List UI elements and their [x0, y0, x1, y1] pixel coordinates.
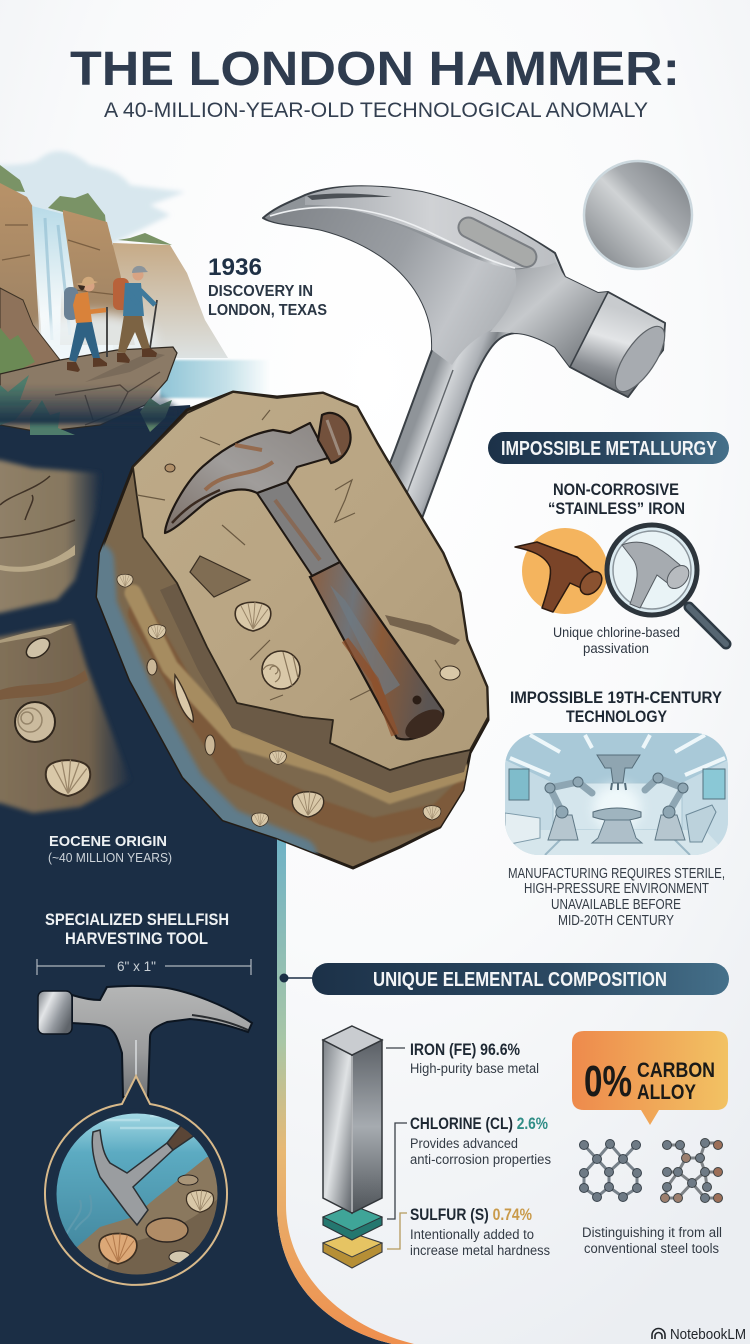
heading: impossible 19th-century technology: TECHNOLOGY	[566, 707, 668, 726]
rusty grip	[310, 562, 443, 739]
callout: 0% carbon alloy: ALLOY	[637, 1081, 696, 1104]
clouds	[0, 151, 185, 245]
rock notch shadows	[190, 556, 250, 597]
foreground plants	[0, 375, 32, 425]
mid cliff	[60, 210, 135, 345]
text: manufacturing requirement: UNAVAILABLE BEFORE	[551, 897, 681, 913]
backpack	[64, 287, 78, 320]
callout: 0% carbon alloy: CARBON	[637, 1059, 715, 1082]
text: manufacturing requirement: MID-20TH CENTURY	[558, 913, 674, 929]
text: distinguishing caption	[582, 1225, 722, 1256]
teal chlorine slab	[323, 1205, 382, 1240]
rock ledge	[0, 347, 177, 432]
label: chlorine: Provides advanced	[410, 1136, 518, 1151]
text: manufacturing requirement	[508, 866, 725, 929]
panel: unique elemental composition heading: UNIQUE ELEMENTAL COMPOSITION	[373, 969, 667, 991]
text: manufacturing requirement: HIGH-PRESSURE ENVIRONMENT	[524, 881, 709, 897]
title: THE LONDON HAMMER:	[70, 43, 680, 96]
rusty head and claw	[165, 423, 328, 533]
dimension line: 6 x 1	[37, 958, 251, 975]
connector lines from column to labels	[386, 1048, 407, 1249]
logo: NotebookLM: NotebookLM	[670, 1327, 746, 1343]
heading: non-corrosive stainless iron	[548, 480, 685, 518]
overhead press tool	[597, 755, 640, 783]
lab floor	[505, 830, 728, 855]
rock top surface	[133, 392, 488, 770]
fossil shells on rock	[235, 602, 271, 631]
left robot arm	[550, 782, 592, 812]
fossil shells	[23, 634, 53, 662]
hiker: man	[113, 266, 157, 363]
hammer slot	[455, 214, 540, 270]
rock shelf shadow	[160, 583, 470, 793]
title: A 40-MILLION-YEAR-OLD TECHNOLOGICAL ANOMALY	[104, 99, 648, 122]
illustration: sterile high-tech lab	[505, 733, 728, 855]
rusty hammer	[165, 413, 448, 744]
right robot arm	[645, 778, 683, 812]
lab back wall	[553, 783, 682, 830]
callout: 0% carbon alloy: 0%	[584, 1057, 632, 1106]
legs	[69, 322, 100, 362]
waterfall	[32, 206, 82, 345]
text: passivation caption	[553, 624, 680, 656]
rusty poll	[318, 413, 351, 463]
callout: 0% carbon alloy	[572, 1031, 728, 1125]
lab ceiling	[505, 733, 728, 783]
illustration: polished steel hammer	[263, 161, 692, 613]
label: specialized shellfish tool: HARVESTING TOOL	[65, 929, 208, 948]
left cliff	[0, 183, 42, 345]
heading: non-corrosive stainless iron: NON-CORROSIVE	[553, 480, 679, 499]
hiker: woman	[64, 277, 107, 372]
inset ring with pointer	[45, 1076, 227, 1285]
console units	[505, 813, 540, 845]
label: sulfur	[410, 1205, 550, 1258]
torso	[73, 292, 92, 323]
hammer striking face	[606, 319, 674, 399]
rock body	[97, 392, 488, 868]
label: eocene origin: (~40 MILLION YEARS)	[48, 850, 172, 865]
illustration: waterfall landscape with hikers	[0, 151, 272, 435]
label: 1936 discovery: DISCOVERY IN	[208, 283, 313, 300]
title	[70, 43, 680, 122]
text: passivation caption: Unique chlorine-based	[553, 624, 680, 640]
icon: magnifier over clean hammer	[607, 525, 726, 644]
connector dot to composition heading	[280, 974, 314, 982]
label: chlorine	[410, 1114, 551, 1167]
chart: stacked element column	[323, 1026, 382, 1268]
illustration: small hammer side view	[38, 986, 252, 1097]
detail inset: hammer digging shellfish underwater	[45, 1076, 227, 1290]
rock cracks	[137, 410, 445, 700]
hammer claw face	[265, 209, 517, 365]
mist	[35, 312, 155, 368]
label: specialized shellfish tool: SPECIALIZED SHELLFISH	[45, 910, 229, 929]
distant cliff	[113, 243, 228, 358]
seabed	[77, 1157, 218, 1269]
label: iron: High-purity base metal	[410, 1061, 539, 1076]
hammer neck	[490, 262, 608, 367]
boulder	[0, 288, 60, 375]
label: eocene origin: EOCENE ORIGIN	[49, 833, 167, 850]
central pedestal	[593, 808, 641, 821]
label: 1936 discovery: 1936	[208, 254, 262, 281]
steel sample disc	[584, 161, 692, 269]
label: sulfur: SULFUR (S) 0.74%	[410, 1205, 532, 1224]
trees on cliffs	[0, 165, 172, 245]
heading: non-corrosive stainless iron: “STAINLESS” IRON	[548, 499, 685, 518]
label: sulfur: increase metal hardness	[410, 1243, 550, 1258]
heading: impossible 19th-century technology	[510, 688, 723, 726]
gradient stripe along sidebar	[277, 840, 414, 1344]
icon: rusty hammer on orange circle	[515, 528, 608, 614]
illustration: fossil rock	[97, 392, 488, 868]
label: 1936 discovery	[208, 254, 327, 319]
diagram: steel molecule lattice	[660, 1138, 722, 1202]
wall screens	[509, 769, 529, 800]
label: chlorine: anti-corrosion properties	[410, 1152, 551, 1167]
seabed shells	[99, 1233, 137, 1264]
label: iron: IRON (FE) 96.6%	[410, 1040, 520, 1059]
boots	[67, 358, 107, 372]
label: 1936 discovery: LONDON, TEXAS	[208, 302, 327, 319]
label: iron	[410, 1040, 539, 1076]
lab side walls	[505, 760, 728, 850]
text: passivation caption: passivation	[583, 640, 649, 656]
label: sulfur: Intentionally added to	[410, 1227, 534, 1242]
dimension line: 6 x 1: 6" x 1"	[117, 958, 156, 974]
panel: dark navy sidebar	[0, 405, 392, 1344]
panel: impossible metallurgy heading	[488, 432, 729, 464]
hammer top band	[305, 186, 556, 268]
steel iron column	[323, 1026, 382, 1213]
pole	[106, 307, 108, 357]
dark fade under scene	[0, 385, 180, 424]
underwater hammer	[92, 1130, 173, 1225]
rusty handle shaft	[257, 482, 340, 577]
heading: impossible 19th-century technology: IMPOSSIBLE 19TH-CENTURY	[510, 688, 723, 707]
illustration: strata cross-section with shells	[0, 460, 130, 813]
label: eocene origin	[48, 833, 172, 865]
hammer silhouette with handle	[263, 186, 665, 613]
gold sulfur slab	[323, 1233, 382, 1268]
water	[160, 360, 272, 398]
panel: unique elemental composition heading	[312, 963, 729, 995]
label: chlorine: CHLORINE (CL) 2.6%	[410, 1114, 548, 1133]
shrub	[0, 328, 35, 375]
handle highlight	[380, 370, 453, 565]
rock strata bands	[97, 560, 480, 855]
label: specialized shellfish tool	[45, 910, 229, 948]
hammer poll cylinder	[570, 292, 665, 397]
diagram: pure carbon-free molecule lattice	[580, 1140, 642, 1202]
text: distinguishing caption: conventional steel tools	[584, 1241, 719, 1256]
text: distinguishing caption: Distinguishing it from all	[582, 1225, 722, 1240]
